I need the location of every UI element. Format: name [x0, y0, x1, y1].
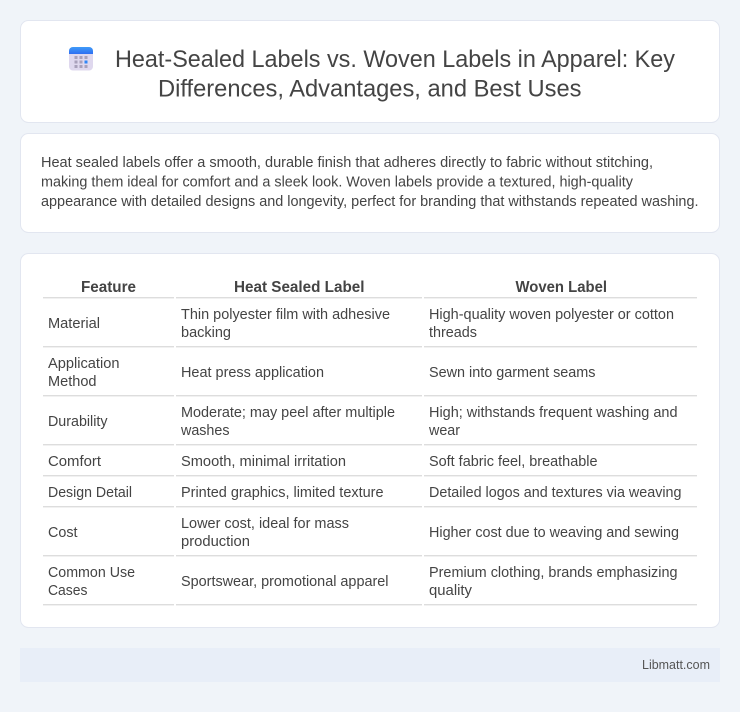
row: Application Method: Application: [48, 356, 120, 372]
row: Application Method: [48, 356, 596, 390]
row: Comfort: Smooth, minimal irritation: [181, 454, 346, 470]
row: Cost: Lower cost, ideal for mass: [181, 516, 349, 532]
footer bar: [20, 648, 720, 682]
table header row: [81, 279, 607, 296]
row: Design Detail: Design Detail: [48, 485, 132, 501]
row: Cost: Higher cost due to weaving and sewing: [429, 525, 679, 541]
row: Material: Material: [48, 316, 100, 332]
row: Durability: High; withstands frequent washing and: [429, 405, 678, 421]
panel: introduction: [20, 134, 720, 232]
row: Material: backing: [181, 325, 231, 341]
row: Design Detail: Detailed logos and textures via weaving: [429, 485, 682, 501]
row: Comfort: [48, 454, 598, 470]
row: Durability: wear: [428, 423, 460, 439]
row: Application Method: Heat press application: [181, 365, 324, 381]
row: Cost: production: [181, 534, 250, 550]
row: Design Detail: [48, 485, 682, 501]
row: Application Method: Method: [48, 374, 96, 390]
row: Durability: [48, 405, 678, 439]
table header row: Feature: [81, 279, 136, 296]
icon: calendar: [69, 47, 93, 70]
table header row: Heat Sealed Label: [234, 279, 364, 296]
row: Comfort: Comfort: [48, 454, 101, 470]
row: Common Use Cases: [48, 565, 678, 599]
row: Common Use Cases: Cases: [48, 583, 88, 599]
row: Cost: [48, 516, 679, 550]
title line 1: Heat-Sealed Labels vs. Woven Labels in Apparel: Key: [115, 46, 675, 73]
row: Common Use Cases: Sportswear, promotional apparel: [181, 574, 388, 590]
row: Durability: Durability: [48, 414, 108, 430]
row: Design Detail: Printed graphics, limited texture: [181, 485, 384, 501]
row: Durability: washes: [180, 423, 230, 439]
intro line 3: appearance with detailed designs and longevity, perfect for branding that withstands repeated washing.: [41, 194, 698, 210]
row: Common Use Cases: quality: [429, 583, 473, 599]
intro line 1: Heat sealed labels offer a smooth, durable finish that adheres directly to fabric without stitching,: [41, 155, 653, 171]
row: Material: threads: [429, 325, 477, 341]
footer text: Libmatt.com: [642, 658, 710, 672]
intro line 2: making them ideal for comfort and a sleek look. Woven labels provide a textured, high-quality: [41, 174, 634, 190]
row: Common Use Cases: Premium clothing, brands emphasizing: [429, 565, 678, 581]
row: Material: [48, 307, 674, 341]
panel: comparison table: [20, 254, 720, 628]
row: Material: High-quality woven polyester or cotton: [429, 307, 674, 323]
row: Cost: Cost: [48, 525, 78, 541]
row: Common Use Cases: Common Use: [48, 565, 135, 581]
row: Durability: Moderate; may peel after multiple: [181, 405, 395, 421]
table header row: Woven Label: [516, 279, 607, 296]
row: Application Method: Sewn into garment seams: [429, 365, 596, 381]
panel: title: [20, 20, 720, 122]
row: Material: Thin polyester film with adhesive: [181, 307, 390, 323]
title line 2: Differences, Advantages, and Best Uses: [158, 76, 582, 102]
row: Comfort: Soft fabric feel, breathable: [429, 454, 598, 470]
